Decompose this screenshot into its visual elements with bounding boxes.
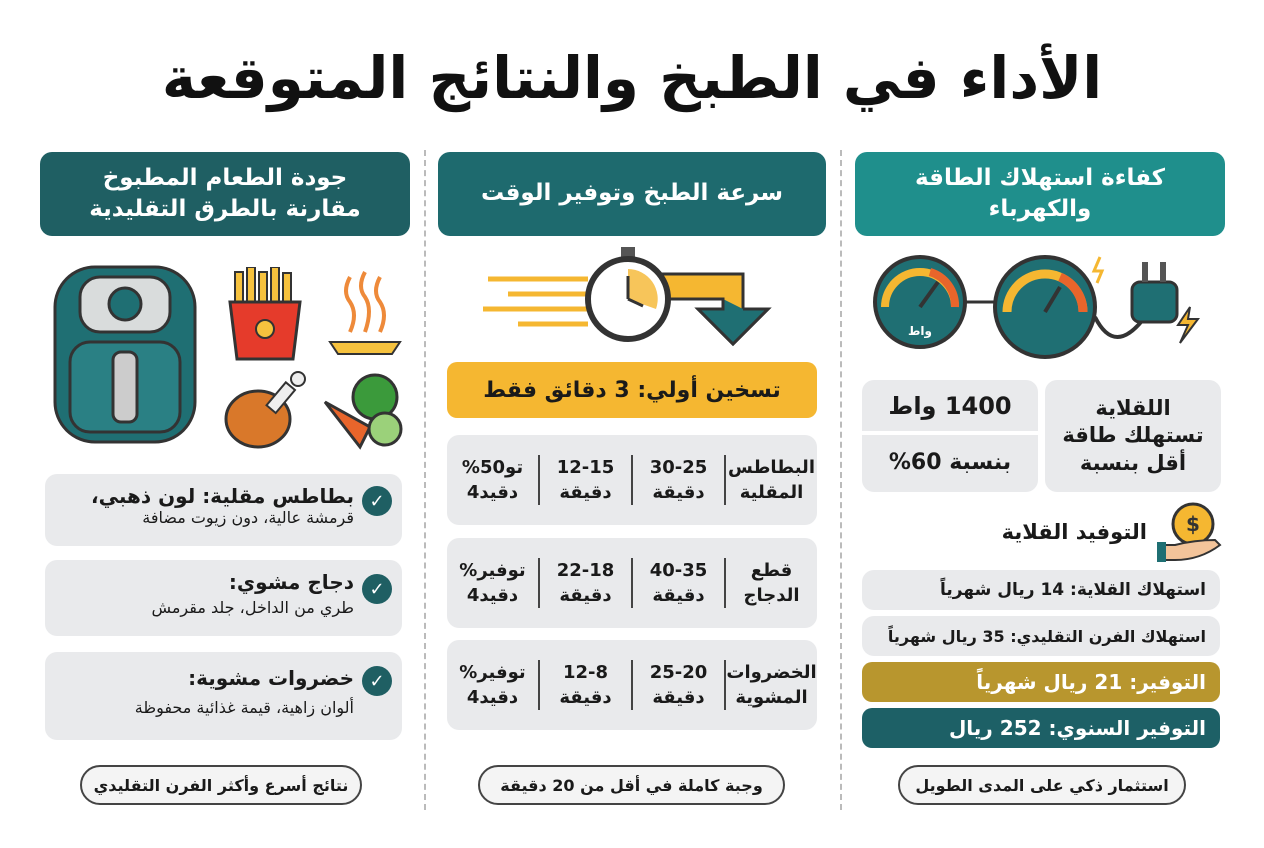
icon: air fryer [54,266,196,444]
stat: less energy [1045,380,1221,492]
annual saving: التوفير السنوي: 252 ريال [949,716,1206,740]
header: food quality [40,152,410,236]
divider [424,150,426,810]
callout: نتائج أسرع وأكثر الفرن التقليدي [94,776,348,794]
row: vegetables: دقيقة [559,687,612,708]
cost: fryer [862,570,1220,610]
row: vegetables [447,640,817,730]
item: chicken: دجاج مشوي: [229,570,354,594]
header: energy: كفاءة استهلاك الطاقة [915,165,1165,191]
callout [80,765,362,805]
panel: energy [855,152,1225,805]
row: vegetables: المشوية [735,687,808,708]
panel: speed [438,152,826,805]
icon: chicken leg [224,371,306,448]
row: chicken: 22-18 [557,560,614,581]
stat: watts [862,380,1038,492]
row: chicken: الدجاج [743,585,800,606]
savings heading with coin icon: $ [1186,512,1200,536]
row: chicken: دقيقة [652,585,705,606]
row: chicken: قطع [751,560,792,581]
item: fries: ✓ [369,490,385,512]
row: fries: 12-15 [557,457,614,478]
annual saving [862,708,1220,748]
monthly saving: التوفير: 21 ريال شهرياً [976,670,1206,694]
item: fries [45,474,402,546]
cost: fryer: استهلاك القلاية: 14 ريال شهرياً [940,580,1206,600]
callout [478,765,785,805]
row: fries: المقلية [740,482,803,503]
savings heading with coin icon [1002,502,1222,562]
header: food quality: جودة الطعام المطبوخ [103,165,347,191]
callout: وجبة كاملة في أقل من 20 دقيقة [500,776,763,794]
row: fries: دقيقة [559,482,612,503]
item: fries: بطاطس مقلية: لون ذهبي، [91,484,354,508]
callout [898,765,1186,805]
icon: vegetables [324,374,402,450]
row: chicken [447,538,817,628]
row: chicken: توفير% [459,560,526,581]
item: vegetables: خضروات مشوية: [188,666,354,690]
row: vegetables: الخضروات [726,662,817,683]
item: vegetables: ✓ [369,670,385,692]
preheat bar [447,362,817,418]
stat: watts: بنسبة 60% [889,450,1011,475]
row: fries: دقيقة [652,482,705,503]
item: vegetables [45,652,402,740]
stat: watts: 1400 واط [888,392,1012,420]
header: speed: سرعة الطبخ وتوفير الوقت [481,180,783,206]
item: chicken: طري من الداخل، جلد مقرمش [151,598,354,617]
header: energy [855,152,1225,236]
icon: gauges and plug [873,255,1200,359]
monthly saving [862,662,1220,702]
row: fries [447,435,817,525]
row: chicken: دقيد4 [467,585,518,606]
panel: food quality [40,152,410,805]
item: vegetables: ألوان زاهية، قيمة غذائية محفوظة [135,698,354,717]
item: chicken: ✓ [369,578,385,600]
icon: gauges and plug: واط [908,324,932,339]
item: fries: قرمشة عالية، دون زيوت مضافة [142,508,354,527]
row: fries: 30-25 [650,457,707,478]
header: food quality: مقارنة بالطرق التقليدية [89,196,361,222]
preheat bar: تسخين أولي: 3 دقائق فقط [483,378,781,402]
cost: oven: استهلاك الفرن التقليدي: 35 ريال شهرياً [888,626,1206,646]
title: الأداء في الطبخ والنتائج المتوقعة [162,44,1102,112]
row: vegetables: دقيقة [652,687,705,708]
row: vegetables: 25-20 [650,662,707,683]
row: fries: دقيد4 [467,482,518,503]
row: chicken: دقيقة [559,585,612,606]
header: speed [438,152,826,236]
icon: stopwatch with arrow [483,247,772,346]
icon: fries [228,267,302,360]
item: chicken [45,560,402,636]
row: vegetables: 12-8 [563,662,608,683]
stat: less energy: أقل بنسبة [1080,451,1186,475]
savings heading with coin icon: التوفيد القلاية [1002,520,1147,544]
row: fries: تو50% [462,457,523,478]
row: vegetables: توفير% [459,662,526,683]
row: chicken: 40-35 [650,560,707,581]
cost: oven [862,616,1220,656]
stat: less energy: تستهلك طاقة [1062,423,1204,447]
row: vegetables: دقيد4 [467,687,518,708]
row: fries: البطاطس [728,457,815,478]
header: energy: والكهرباء [989,196,1091,222]
stat: less energy: اللقلاية [1095,396,1171,420]
icon: steam plate [328,271,402,355]
callout: استثمار ذكي على المدى الطويل [915,776,1169,794]
